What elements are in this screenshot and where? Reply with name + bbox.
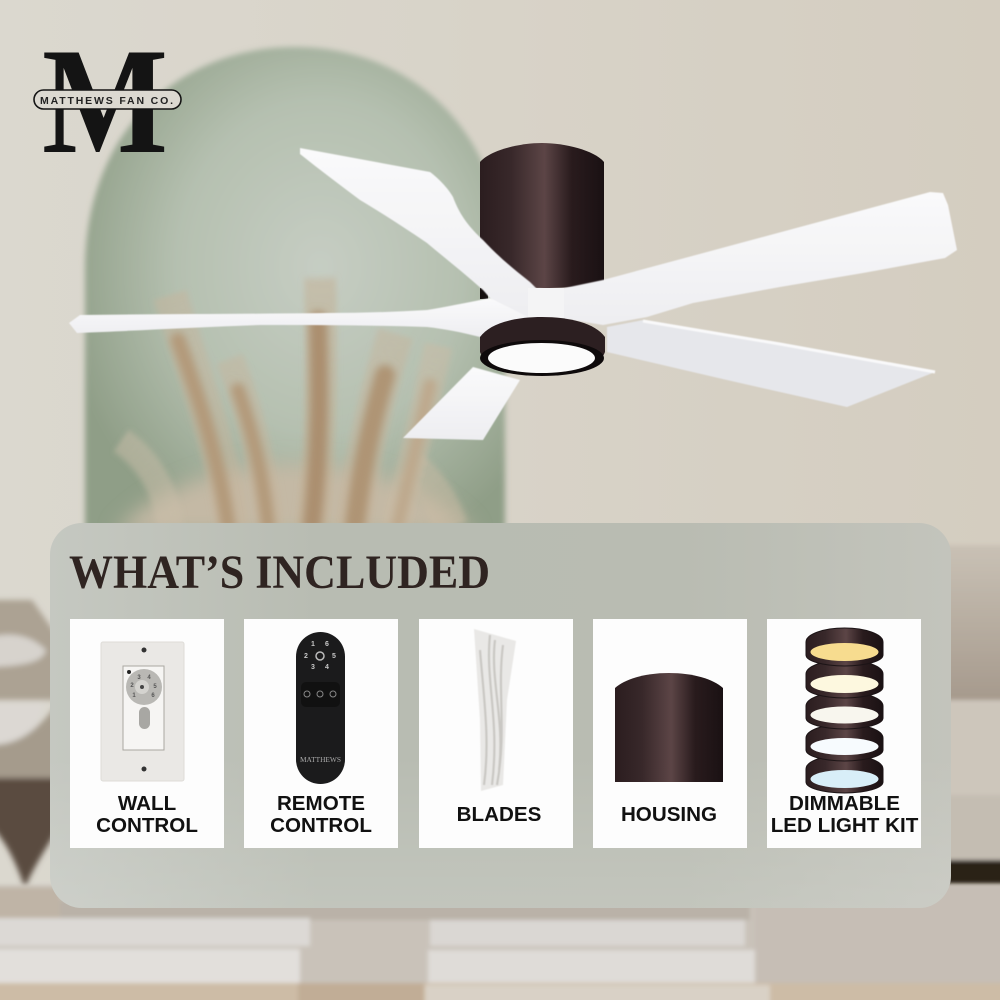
icon: remote control: 1	[311, 641, 315, 648]
background: cushions left	[0, 600, 60, 888]
icon: remote control: MATTHEWS	[300, 755, 341, 764]
light ring	[480, 317, 605, 376]
icon: wall control: 1	[132, 693, 136, 699]
card: blades	[419, 619, 573, 848]
label: wall control: WALL	[118, 792, 176, 815]
label: dimmable led light kit: DIMMABLE	[789, 792, 900, 815]
icon: wall control: 4	[147, 675, 151, 681]
icon: remote control: 4	[325, 664, 329, 671]
light 5	[806, 755, 883, 793]
light 3	[806, 692, 883, 729]
logo name: MATTHEWS FAN CO.	[40, 95, 173, 107]
light 2	[806, 660, 883, 698]
label: housing: HOUSING	[621, 803, 717, 826]
blade: lower right	[607, 320, 935, 407]
motor shadow	[480, 288, 488, 299]
logo letter M: M	[42, 17, 168, 185]
icon: wall control: 5	[153, 684, 157, 690]
icon: wall control	[101, 642, 184, 781]
card: wall control	[70, 619, 224, 848]
background: floor	[0, 885, 1000, 1000]
icon: led light stack	[806, 628, 883, 793]
icon: remote control: 3	[311, 664, 315, 671]
label: blades: BLADES	[457, 803, 541, 826]
icon: blades	[474, 629, 516, 791]
label: wall control: CONTROL	[96, 814, 198, 837]
ceiling fan	[69, 143, 957, 440]
icon: housing	[615, 673, 723, 782]
light 4	[806, 724, 883, 761]
heading: WHAT’S INCLUDED	[69, 546, 490, 599]
logo	[34, 17, 181, 185]
label: dimmable led light kit: LED LIGHT KIT	[771, 814, 919, 837]
blade: lower left	[403, 367, 520, 440]
card: dimmable led light kit	[767, 619, 921, 848]
icon: remote control: 5	[332, 653, 336, 660]
background: sofa right	[900, 545, 1000, 884]
label: remote control: REMOTE	[277, 792, 365, 815]
blade: right	[555, 192, 957, 325]
label: remote control: CONTROL	[270, 814, 372, 837]
blade: upper left	[300, 148, 548, 318]
icon: remote control: 2	[304, 653, 308, 660]
card: housing	[593, 619, 747, 848]
blade: left	[69, 298, 530, 337]
housing	[480, 143, 604, 288]
background: arch niche	[85, 47, 505, 535]
hub	[528, 288, 564, 320]
panel: what's included	[50, 523, 951, 908]
background: pampas grass	[115, 278, 475, 535]
card: remote control	[244, 619, 398, 848]
logo banner	[34, 90, 181, 109]
icon: wall control: 2	[130, 683, 134, 689]
icon: wall control: 6	[151, 693, 155, 699]
light 1	[806, 628, 883, 666]
icon: remote control	[296, 632, 345, 784]
icon: remote control: 6	[325, 641, 329, 648]
icon: wall control: 3	[137, 675, 141, 681]
